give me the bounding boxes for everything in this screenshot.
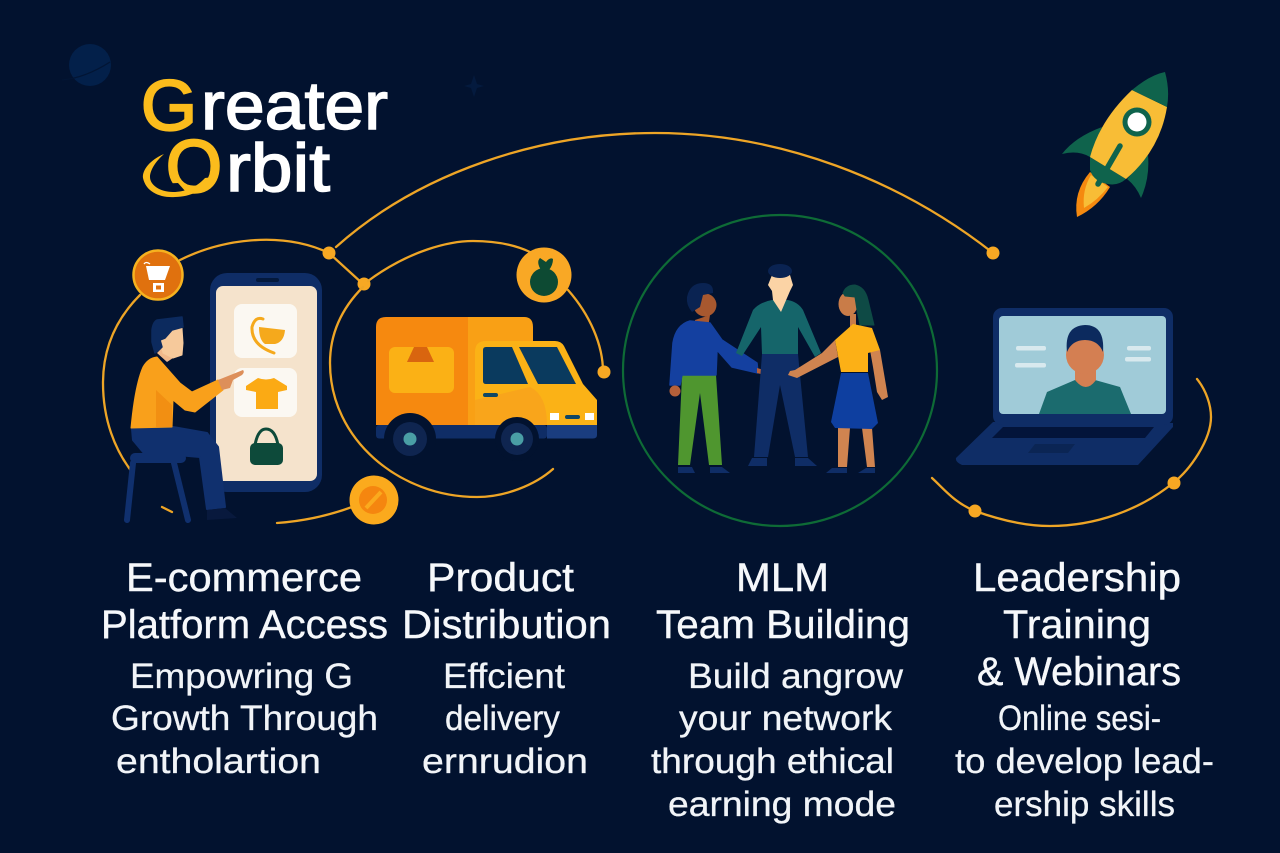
text: MLM description: Build angrow	[688, 657, 904, 696]
icon: shopping cart badge	[134, 250, 182, 300]
text: e-commerce heading: Platform Access	[101, 603, 388, 647]
orbit arc four	[932, 379, 1211, 526]
panel: leadership training	[932, 308, 1214, 824]
orbit ring two	[330, 241, 610, 497]
icon: produce bag badge	[516, 248, 572, 302]
text: MLM heading: Team Building	[656, 603, 910, 647]
text: MLM heading: MLM	[736, 556, 829, 600]
text: distribution heading	[402, 556, 611, 647]
connector: link between dots	[329, 253, 363, 284]
connector: dot at end of large arc	[986, 246, 1000, 260]
text: leadership description	[955, 699, 1214, 824]
text: distribution description	[422, 657, 588, 781]
phone icon: bowl	[252, 318, 285, 353]
text: MLM description: earning mode	[668, 785, 896, 824]
illustration: delivery truck	[376, 317, 597, 465]
text: leadership heading: & Webinars	[977, 650, 1181, 694]
text: leadership description: Online sesi-	[998, 699, 1161, 738]
text: e-commerce description	[111, 657, 378, 781]
text: leadership description: to develop lead-	[955, 742, 1214, 781]
connector: large orbit arc	[336, 133, 993, 253]
decoration: faint planet	[62, 44, 111, 86]
text: MLM description	[651, 657, 904, 824]
phone icon: bag	[250, 429, 283, 465]
text: distribution description: Effcient	[443, 657, 565, 696]
text: e-commerce description: entholartion	[116, 742, 321, 781]
figure: right person	[788, 285, 888, 473]
figure: seated person pointing	[127, 317, 244, 520]
text: leadership description: ership skills	[994, 785, 1175, 824]
text: distribution description: ernrudion	[422, 742, 588, 781]
icon: smartphone	[210, 273, 322, 492]
text: MLM description: through ethical	[651, 742, 894, 781]
panel: product distribution	[330, 241, 611, 781]
title line two	[143, 125, 330, 208]
text: leadership heading: Leadership	[973, 556, 1181, 600]
text: e-commerce heading	[101, 556, 388, 647]
figure: left person	[670, 283, 771, 473]
text: distribution heading: Distribution	[402, 603, 611, 647]
title line one	[141, 67, 388, 146]
title: Greater Orbit logo	[141, 67, 388, 208]
figure: centre person	[736, 264, 821, 466]
panel: e-commerce	[101, 240, 398, 781]
text: e-commerce description: Growth Through	[111, 699, 378, 738]
text: leadership heading: Training	[1003, 603, 1151, 647]
text: e-commerce description: Empowring G	[130, 657, 353, 696]
phone icon: t-shirt	[246, 378, 287, 409]
text: distribution heading: Product	[427, 556, 574, 600]
text: MLM description: your network	[679, 699, 893, 738]
panel: MLM team building	[623, 215, 937, 824]
text: distribution description: delivery	[445, 699, 560, 738]
text: leadership heading	[973, 556, 1181, 694]
text: MLM heading	[656, 556, 910, 647]
title line two: O	[166, 125, 222, 208]
title line one: G	[141, 67, 197, 146]
decoration: faint star	[464, 75, 484, 97]
text: e-commerce heading: E-commerce	[126, 556, 362, 600]
title line one: reater	[201, 68, 388, 144]
icon: rocket	[1062, 72, 1168, 217]
green ring	[623, 215, 937, 526]
orbit ring one	[103, 240, 370, 523]
illustration: laptop with presenter	[956, 308, 1173, 465]
icon: coin	[350, 476, 398, 524]
title line two: rbit	[226, 130, 330, 206]
